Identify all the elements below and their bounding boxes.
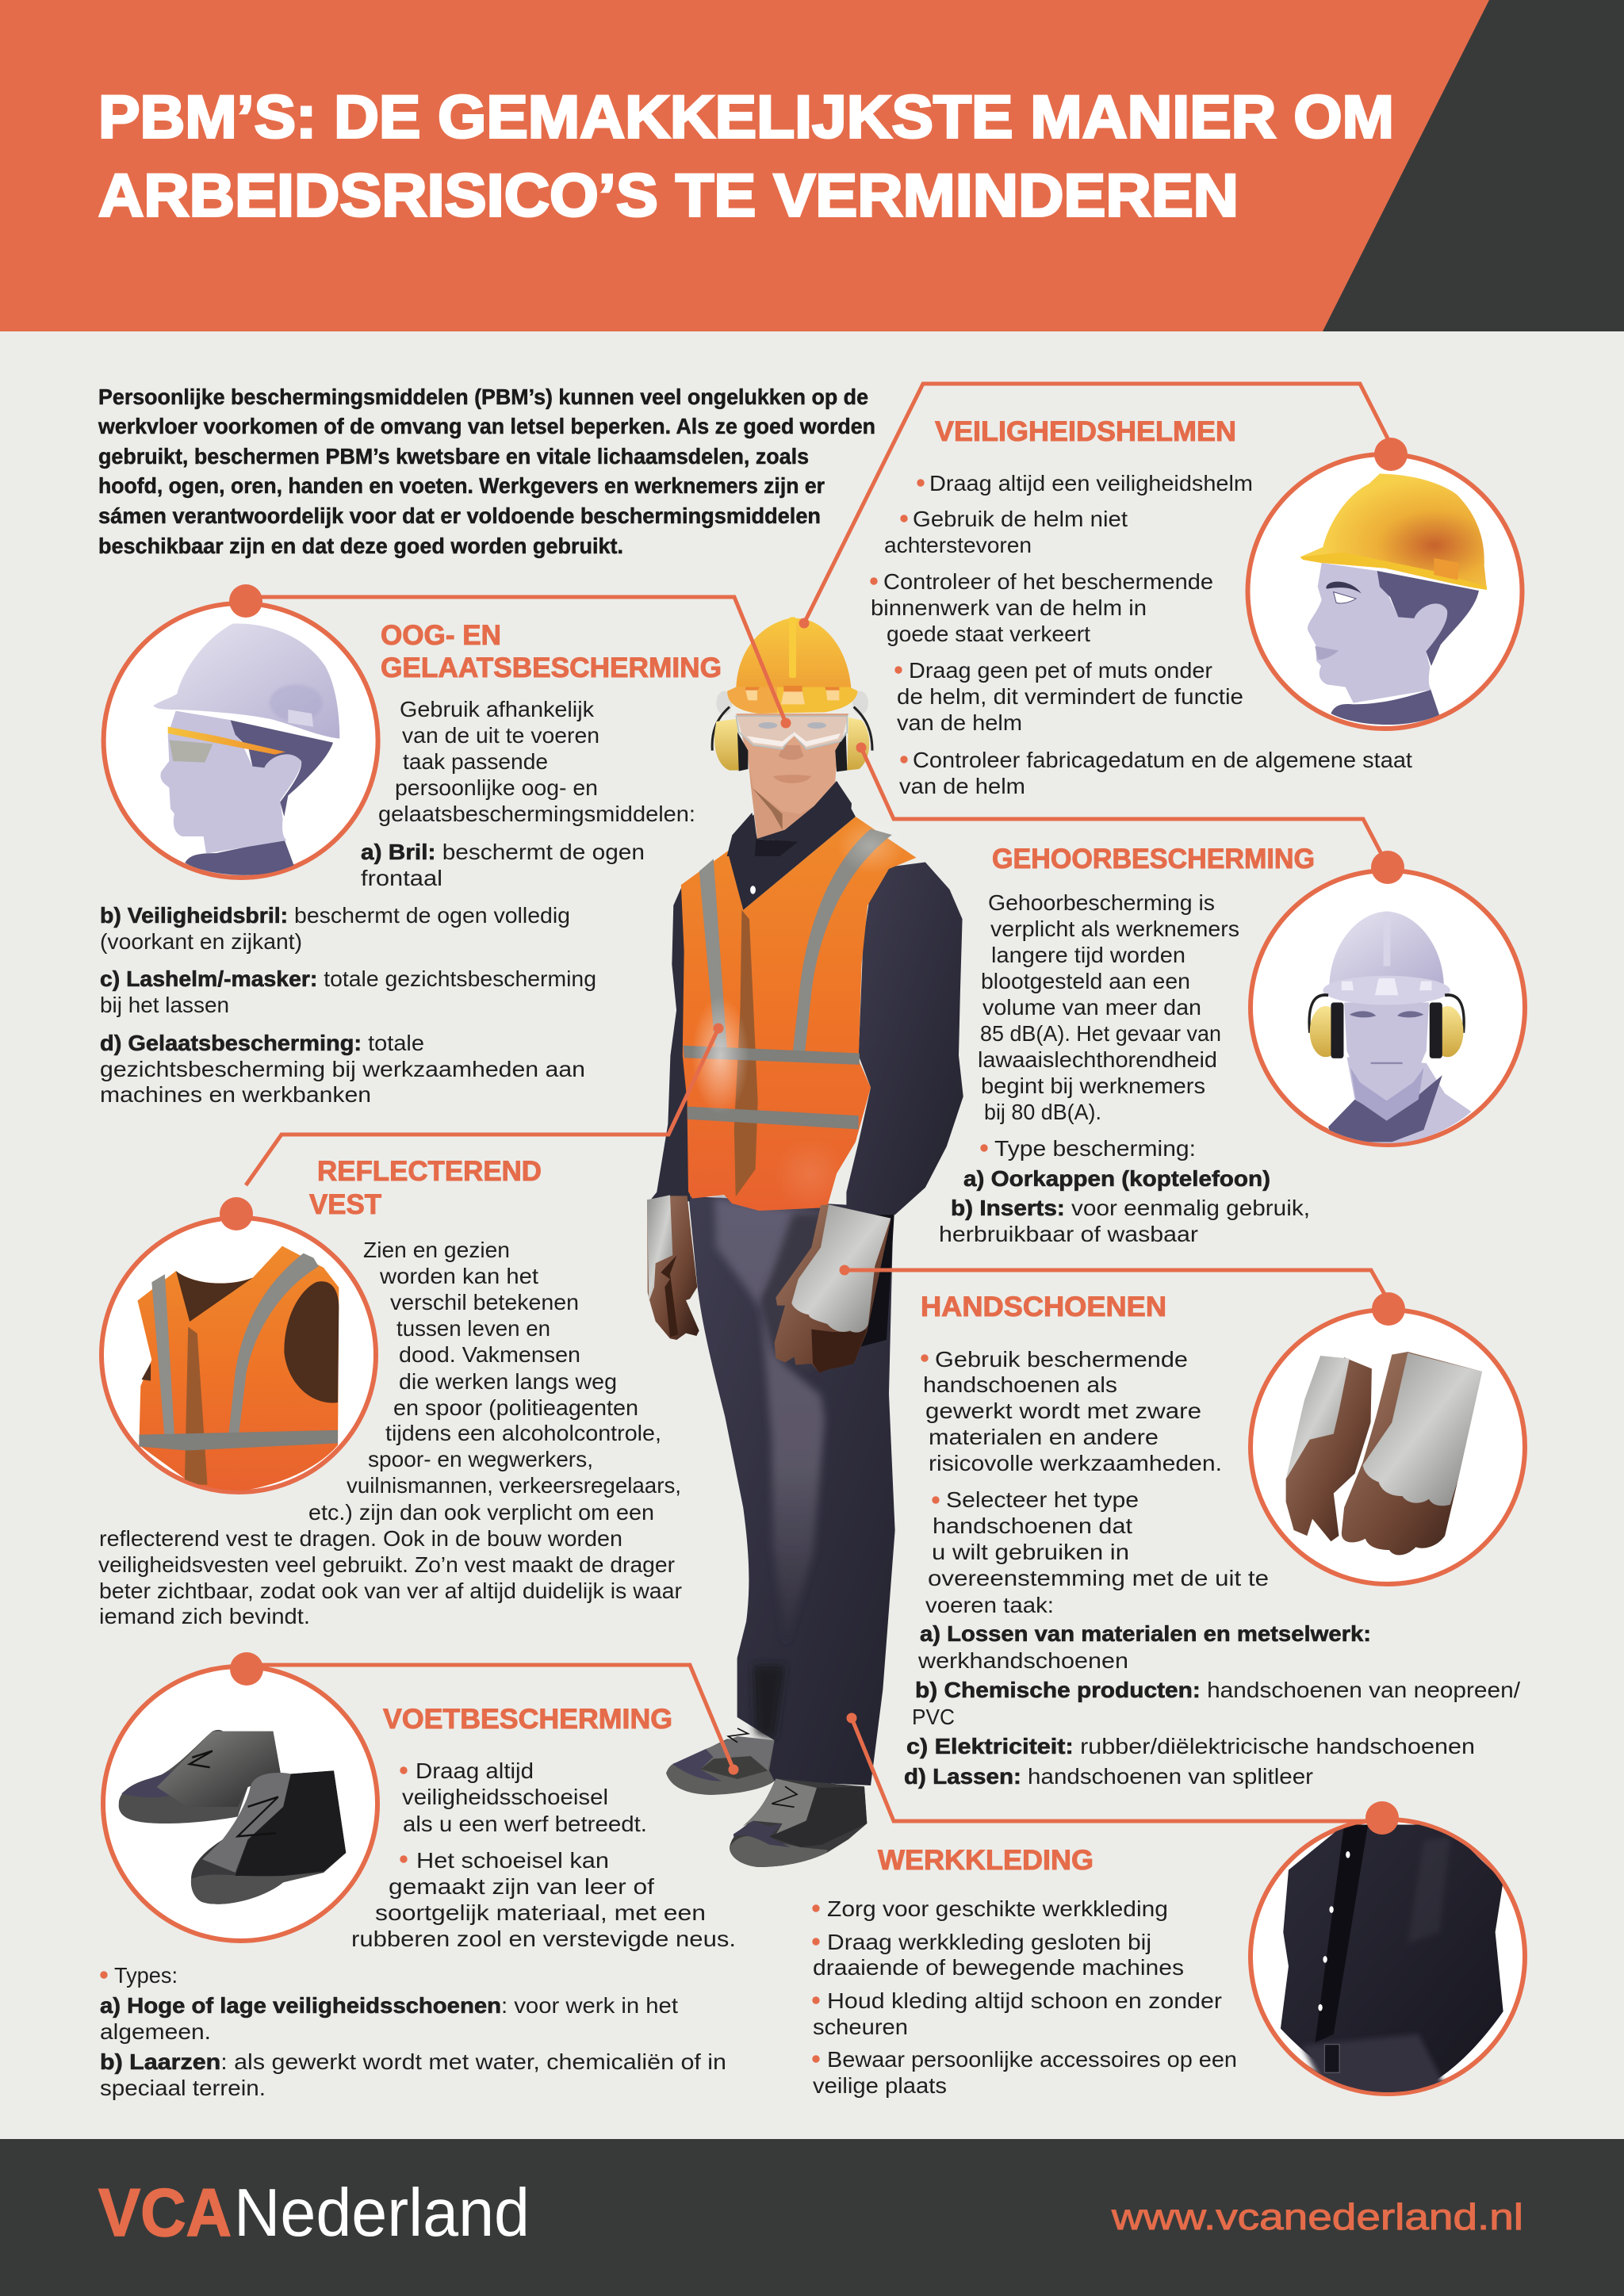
text: feet body: soortgelijk materiaal, met een xyxy=(375,1900,706,1925)
intro text: werkvloer voorkomen of de omvang van letsel beperken. Als ze goed worden xyxy=(98,414,875,438)
text: helmet bullets: goede staat verkeert xyxy=(887,622,1090,646)
text: feet body: gemaakt zijn van leer of xyxy=(389,1874,654,1899)
panel: handschoenen xyxy=(839,1265,1525,1789)
text: eye protection body: taak passende xyxy=(403,749,548,774)
connector dot: vest circle xyxy=(220,1197,253,1230)
text: gloves body: a) Lossen van materialen en metselwerk: xyxy=(920,1621,1371,1646)
text: feet body: Draag altijd xyxy=(416,1758,534,1783)
worker shirt under vest xyxy=(728,782,856,910)
text: helmet bullets: Gebruik de helm niet xyxy=(913,507,1128,531)
text: vest body: etc.) zijn dan ook verplicht om een xyxy=(308,1500,654,1525)
text: vest body: worden kan het xyxy=(379,1264,538,1288)
text: vest body: vuilnismannen, verkeersregelaars, xyxy=(347,1473,681,1498)
text: vest body: iemand zich bevindt. xyxy=(99,1604,310,1628)
text: feet body: algemeen. xyxy=(100,2019,211,2044)
worker glasses xyxy=(736,716,847,749)
text: helmet bullets: Draag geen pet of muts onder xyxy=(909,658,1212,683)
panel: reflecterend vest xyxy=(98,1023,723,1628)
connector line: vest xyxy=(246,1028,718,1185)
text: workwear bullets: draaiende of bewegende machines xyxy=(813,1955,1184,1980)
connector dot: helmet xyxy=(799,618,809,628)
text: workwear bullets xyxy=(812,1896,1237,2098)
text: eye protection body: gezichtsbescherming bij werkzaamheden aan xyxy=(100,1057,585,1081)
icon circle: orange vest xyxy=(102,1218,376,1493)
intro text: Persoonlijke beschermingsmiddelen (PBM’s) kunnen veel ongelukken op de xyxy=(98,385,868,409)
text: gloves body: handschoenen als xyxy=(923,1372,1117,1397)
text: feet body: b) Laarzen : als gewerkt wordt met water, chemicaliën of in xyxy=(100,2049,726,2074)
header banner xyxy=(0,0,1624,331)
text: eye protection body: van de uit te voeren xyxy=(402,723,599,748)
text: hearing body: langere tijd worden xyxy=(991,943,1185,967)
worker legs xyxy=(688,1196,895,1785)
icon circle: gloves xyxy=(1251,1310,1525,1584)
text: hearing body: Type bescherming: xyxy=(994,1136,1196,1161)
connector dot: eye circle xyxy=(229,584,262,618)
text: hearing body: herbruikbaar of wasbaar xyxy=(939,1222,1198,1246)
worker head xyxy=(712,617,872,856)
website url: www.vcanederland.nl xyxy=(1111,2196,1523,2237)
text: hearing body: bij 80 dB(A). xyxy=(984,1100,1101,1124)
icon circle: safety shoes xyxy=(103,1667,377,1941)
text: hearing body: 85 dB(A). Het gevaar van xyxy=(980,1021,1221,1046)
connector dot: hearing xyxy=(856,742,866,753)
text: gloves body: voeren taak: xyxy=(925,1593,1054,1617)
text: gloves body: materialen en andere xyxy=(929,1425,1159,1449)
text: vest body: tijdens een alcoholcontrole, xyxy=(385,1421,661,1445)
text: helmet bullets: de helm, dit vermindert de functie xyxy=(897,684,1243,709)
text: eye protection body: c) Lashelm/-masker: totale gezichtsbescherming xyxy=(100,966,596,991)
title: PBM’S: DE GEMAKKELIJKSTE MANIER OM xyxy=(98,84,1394,151)
heading: gehoorbescherming: GEHOORBESCHERMING xyxy=(992,844,1315,874)
connector line: helmet xyxy=(804,384,1389,623)
connector line: hearing xyxy=(861,748,1381,854)
icon circle: head with ear muffs xyxy=(1251,871,1525,1145)
intro text: gebruikt, beschermen PBM’s kwetsbare en vitale lichaamsdelen, zoals xyxy=(98,444,809,469)
text: eye protection body: d) Gelaatsbescherming: totale xyxy=(100,1031,424,1055)
text: vest body: dood. Vakmensen xyxy=(399,1342,580,1367)
text: helmet bullets: van de helm xyxy=(897,710,1022,735)
text: vest body: beter zichtbaar, zodat ook van ver af altijd duidelijk is waar xyxy=(99,1578,682,1603)
text: vest body: veiligheidsvesten veel gebruikt. Zo’n vest maakt de drager xyxy=(98,1552,675,1577)
text: hearing body: volume van meer dan xyxy=(982,995,1201,1020)
right glove xyxy=(775,1204,891,1373)
panel: veiligheidshelmen xyxy=(799,384,1522,798)
text: gloves body: overeenstemming met de uit te xyxy=(928,1566,1269,1590)
heading: reflecterend vest: REFLECTEREND xyxy=(317,1156,542,1187)
worker collar xyxy=(727,781,852,856)
text: gloves body: d) Lassen: handschoenen van splitleer xyxy=(904,1764,1313,1789)
panel: gehoorbescherming xyxy=(856,742,1525,1246)
text: feet body: veiligheidsschoeisel xyxy=(402,1785,608,1809)
heading: reflecterend vest xyxy=(309,1156,542,1220)
text: hearing body: lawaaislechthorendheid xyxy=(978,1047,1217,1072)
text: helmet bullets: binnenwerk van de helm in xyxy=(871,595,1147,620)
text: eye protection body: machines en werkbanken xyxy=(100,1082,371,1107)
text: eye protection body: a) Bril: beschermt de ogen xyxy=(361,840,645,864)
text: vest body: en spoor (politieagenten xyxy=(393,1395,638,1420)
text: eye protection body: (voorkant en zijkant) xyxy=(100,929,302,954)
panel: voetbescherming xyxy=(100,1652,739,2100)
text: vest body: spoor- en wegwerkers, xyxy=(368,1447,593,1471)
connector line: gloves xyxy=(845,1270,1385,1295)
text: eye protection body: frontaal xyxy=(361,866,442,890)
intro text: hoofd, ogen, oren, handen en voeten. Werkgevers en werknemers zijn er xyxy=(98,473,825,498)
text: gloves body: b) Chemische producten: handschoenen van neopreen/ xyxy=(915,1678,1520,1702)
text: gloves body: PVC xyxy=(912,1705,955,1729)
heading: oog- en gelaatsbescherming: OOG- EN xyxy=(381,620,501,651)
connector dot: workwear xyxy=(847,1712,856,1724)
text: hearing body: a) Oorkappen (koptelefoon) xyxy=(963,1166,1270,1191)
text: vest body xyxy=(98,1238,682,1628)
text: hearing body: begint bij werknemers xyxy=(981,1073,1205,1098)
worker figure xyxy=(647,617,963,1867)
connector line: feet xyxy=(247,1665,733,1770)
heading: oog- en gelaatsbescherming: GELAATSBESCHERMING xyxy=(381,652,722,683)
footer xyxy=(0,2139,1624,2296)
connector dot: gloves circle xyxy=(1372,1292,1405,1326)
heading: werkkleding: WERKKLEDING xyxy=(878,1845,1094,1876)
text: workwear bullets: Zorg voor geschikte werkkleding xyxy=(827,1896,1168,1921)
text: workwear bullets: Draag werkkleding gesloten bij xyxy=(827,1930,1151,1954)
text: hearing body: blootgesteld aan een xyxy=(981,969,1190,993)
text: gloves body: gewerkt wordt met zware xyxy=(925,1399,1201,1423)
connector dot: helmet circle xyxy=(1374,438,1408,471)
text: eye protection body: persoonlijke oog- en xyxy=(395,775,598,800)
text: vest body: Zien en gezien xyxy=(363,1238,510,1262)
heading: handschoenen: HANDSCHOENEN xyxy=(921,1292,1166,1322)
intro text xyxy=(98,385,875,558)
text: hearing body: b) Inserts: voor eenmalig gebruik, xyxy=(951,1196,1310,1220)
text: vest body: tussen leven en xyxy=(396,1316,550,1341)
text: helmet bullets: van de helm xyxy=(899,774,1025,798)
logo: VCA Nederland: Nederland xyxy=(234,2175,530,2251)
text: feet body: als u een werf betreedt. xyxy=(403,1812,647,1836)
connector dot: feet xyxy=(728,1765,739,1774)
panel: werkkleding xyxy=(812,1712,1525,2098)
text: vest body: verschil betekenen xyxy=(390,1290,579,1314)
text: eye protection body: bij het lassen xyxy=(100,993,229,1017)
text: feet body: rubberen zool en verstevigde neus. xyxy=(351,1927,736,1951)
text: gloves body xyxy=(904,1347,1520,1789)
heading: veiligheidshelmen: VEILIGHEIDSHELMEN xyxy=(935,416,1236,447)
panel: oog- en gelaatsbescherming xyxy=(100,584,791,1107)
worker vest xyxy=(681,817,916,1211)
text: vest body: reflecterend vest te dragen. Ook in de bouw worden xyxy=(99,1526,622,1551)
text: gloves body: werkhandschoenen xyxy=(917,1648,1128,1673)
text: gloves body: risicovolle werkzaamheden. xyxy=(929,1451,1222,1475)
text: hearing body: Gehoorbescherming is xyxy=(988,890,1215,915)
text: gloves body: Selecteer het type xyxy=(946,1487,1139,1512)
connector dot: hearing circle xyxy=(1371,851,1404,884)
text: helmet bullets xyxy=(870,471,1412,798)
text: helmet bullets: Draag altijd een veiligheidshelm xyxy=(929,471,1253,496)
text: hearing body: verplicht als werknemers xyxy=(990,916,1239,941)
worker sleeves xyxy=(648,862,963,1215)
intro text: sámen verantwoordelijk voor dat er voldoende beschermingsmiddelen xyxy=(98,503,821,528)
text: gloves body: handschoenen dat xyxy=(933,1513,1132,1538)
logo: VCA Nederland xyxy=(98,2175,530,2251)
left glove xyxy=(647,1195,699,1340)
heading: voetbescherming: VOETBESCHERMING xyxy=(383,1704,672,1735)
text: helmet bullets: Controleer fabricagedatum en de algemene staat xyxy=(913,748,1412,772)
text: gloves body: Gebruik beschermende xyxy=(935,1347,1188,1372)
connector dot: gloves xyxy=(839,1265,850,1275)
text: workwear bullets: Bewaar persoonlijke accessoires op een xyxy=(827,2047,1237,2072)
text: eye protection body: b) Veiligheidsbril: beschermt de ogen volledig xyxy=(100,903,570,928)
text: helmet bullets: achterstevoren xyxy=(884,533,1032,557)
worker gloves xyxy=(647,1195,891,1373)
text: feet body xyxy=(100,1758,736,2100)
title: ARBEIDSRISICO’S TE VERMINDEREN xyxy=(98,162,1239,230)
text: helmet bullets: Controleer of het beschermende xyxy=(883,569,1213,594)
intro text: beschikbaar zijn en dat deze goed worden gebruikt. xyxy=(98,534,623,558)
text: workwear bullets: scheuren xyxy=(813,2015,908,2039)
text: gloves body: c) Elektriciteit: rubber/diëlektricische handschoenen xyxy=(906,1734,1475,1758)
text: eye protection body xyxy=(100,697,695,1107)
heading: oog- en gelaatsbescherming xyxy=(381,620,722,683)
text: hearing body xyxy=(939,890,1310,1246)
text: eye protection body: Gebruik afhankelijk xyxy=(400,697,594,721)
icon circle: dark work jacket xyxy=(1251,1820,1525,2096)
worker eyes xyxy=(758,722,826,729)
worker ear muffs xyxy=(712,707,872,771)
heading: reflecterend vest: VEST xyxy=(309,1189,381,1220)
text: workwear bullets: Houd kleding altijd schoon en zonder xyxy=(827,1988,1222,2013)
connector line: workwear xyxy=(852,1718,1371,1821)
text: feet body: speciaal terrein. xyxy=(100,2076,266,2100)
text: eye protection body: gelaatsbeschermingsmiddelen: xyxy=(378,802,695,826)
text: workwear bullets: veilige plaats xyxy=(813,2073,947,2098)
connector dot: eye xyxy=(780,718,791,728)
icon circle: head with yellow helmet xyxy=(1248,454,1522,729)
worker helmet xyxy=(727,617,858,714)
connector dot: vest xyxy=(714,1023,723,1034)
worker neck and face xyxy=(736,714,848,839)
icon circle: head with safety glasses xyxy=(104,603,378,878)
text: feet body: Types: xyxy=(114,1963,178,1988)
text: vest body: die werken langs weg xyxy=(399,1369,617,1394)
text: feet body: a) Hoge of lage veiligheidsschoenen : voor werk in het xyxy=(100,1993,678,2018)
connector dot: shoes circle xyxy=(230,1652,263,1686)
connector line: eye xyxy=(246,597,786,723)
title xyxy=(98,84,1394,230)
text: feet body: Het schoeisel kan xyxy=(416,1848,609,1873)
text: gloves body: u wilt gebruiken in xyxy=(932,1540,1129,1564)
worker shoes xyxy=(666,1728,867,1867)
connector dot: jacket circle xyxy=(1365,1801,1399,1835)
logo: VCA Nederland: VCA xyxy=(98,2175,232,2251)
